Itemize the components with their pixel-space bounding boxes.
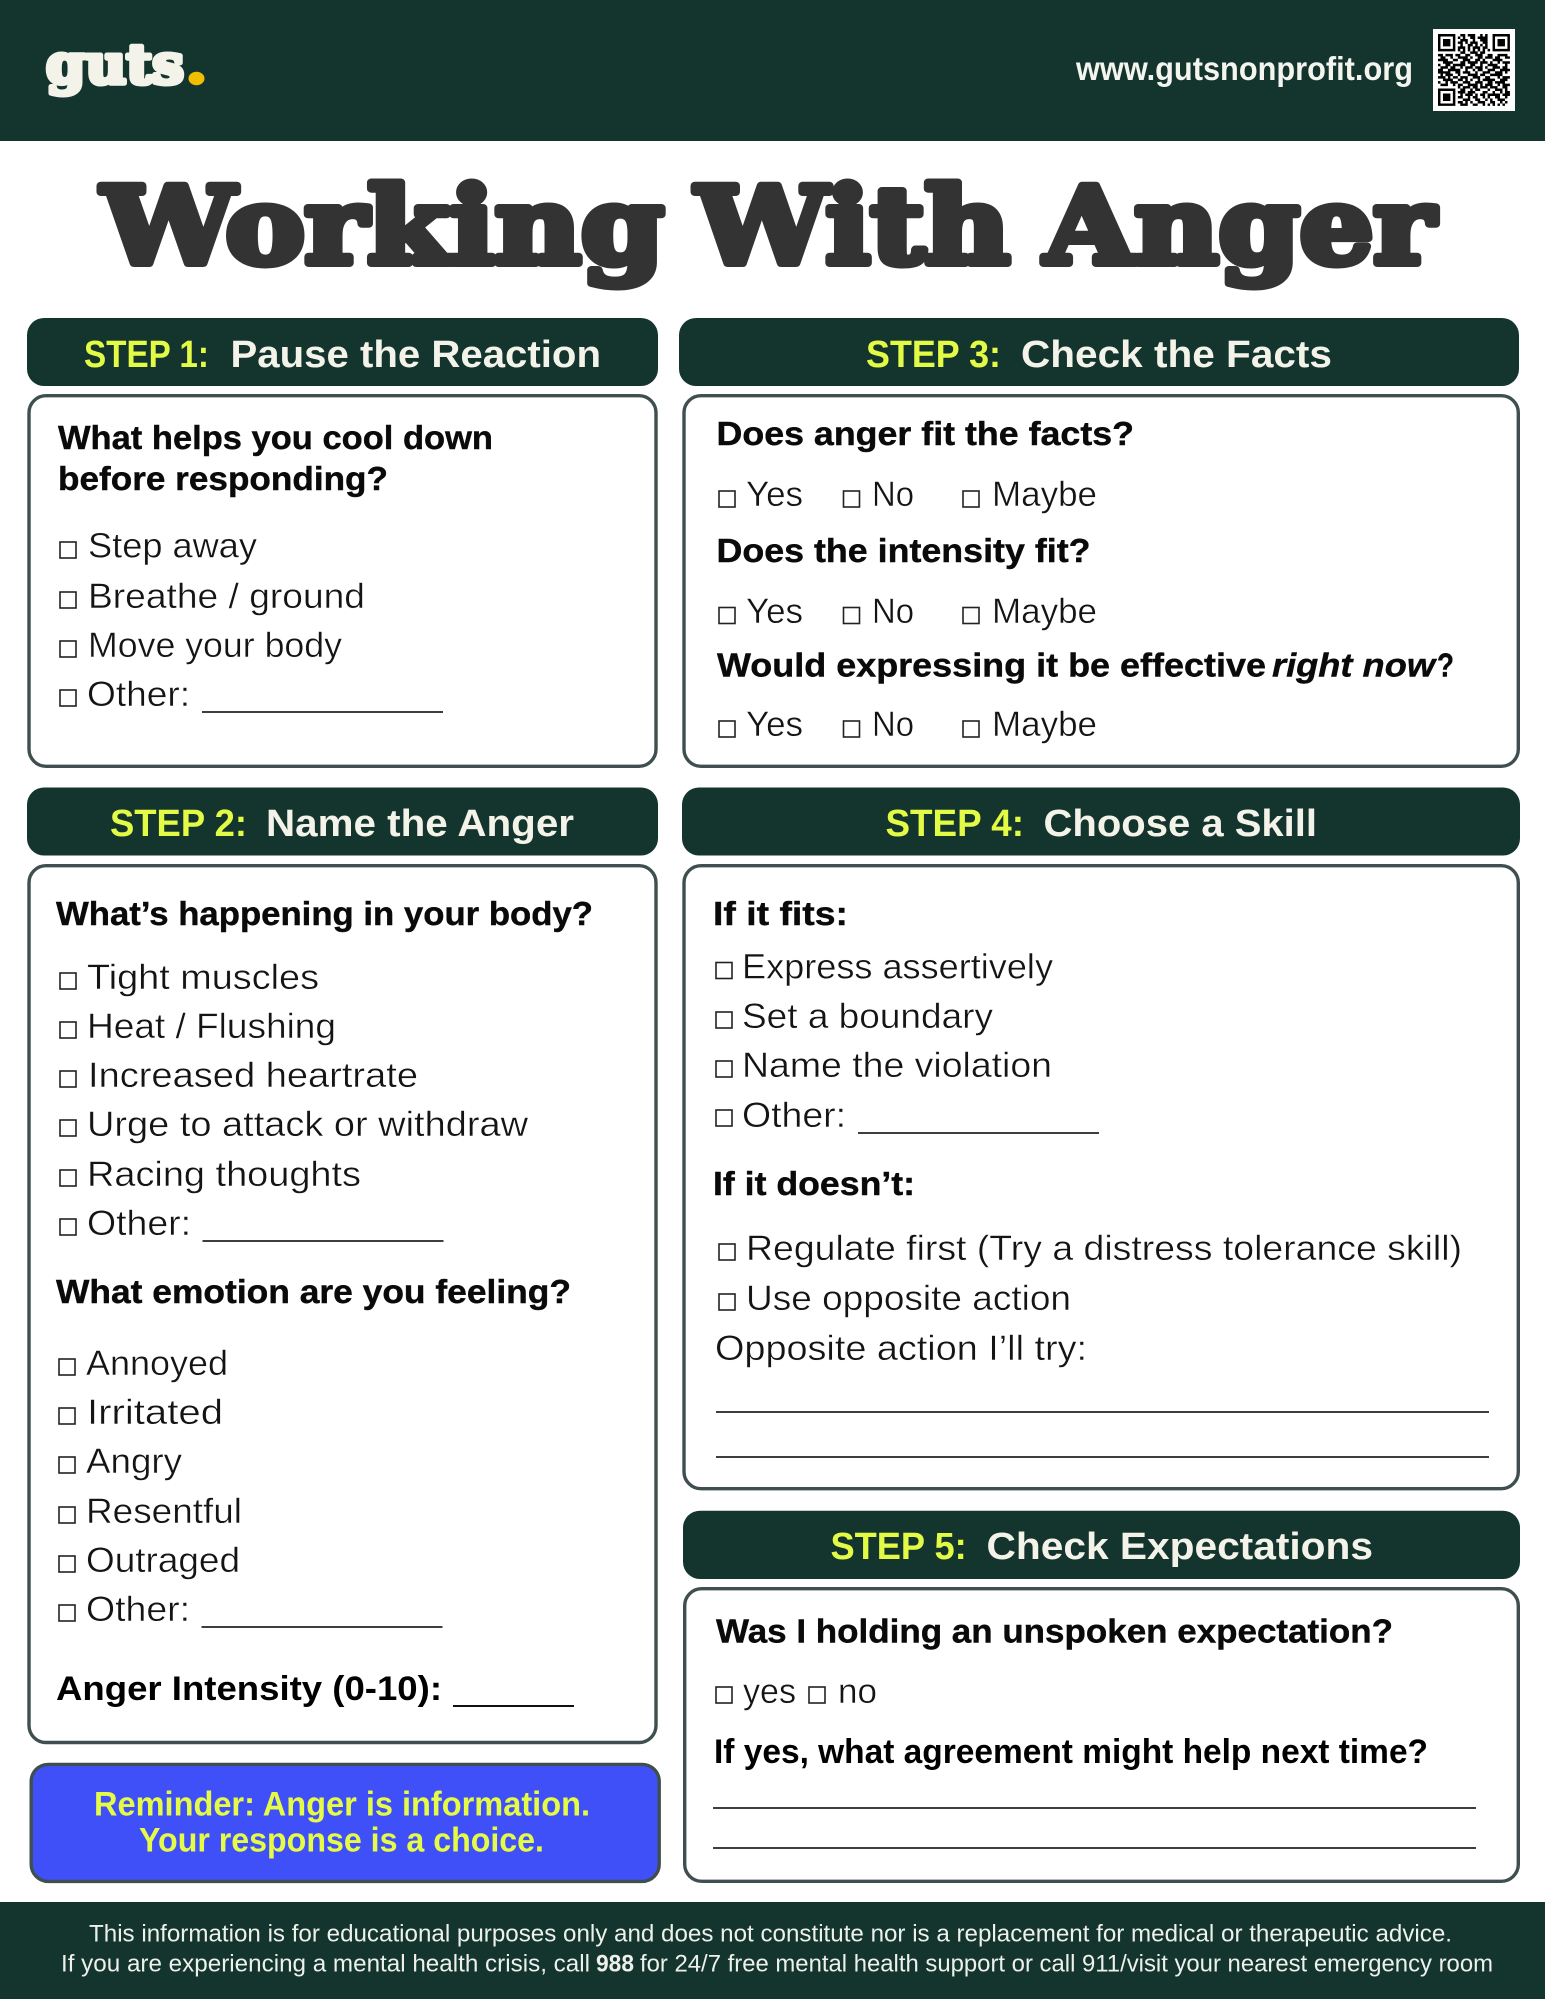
step 5 heading bar	[683, 1511, 1520, 1579]
question: effective right now: ?	[1437, 647, 1454, 684]
checklist: emotions: Other:	[86, 1590, 190, 1629]
opposite action write-in: Opposite action I’ll try:	[715, 1329, 1087, 1368]
subheading: if it fits: If it fits:	[713, 895, 848, 932]
checklist: if it fits: Set a boundary	[742, 997, 994, 1036]
checklist: cool down options	[60, 527, 443, 714]
question: agreement: If yes, what agreement might help next time?	[714, 1733, 1428, 1771]
options row 3: Yes	[746, 705, 803, 744]
options row 1: Yes	[746, 475, 803, 514]
callout: reminder: Your response is a choice.	[139, 1822, 544, 1860]
title: Working	[101, 163, 664, 288]
footer disclaimer	[0, 1902, 1545, 1999]
checklist: body signs	[60, 958, 529, 1243]
checklist: emotions: Resentful	[86, 1492, 242, 1531]
question: intensity: Does the intensity fit?	[716, 532, 1090, 569]
options row 2: No	[872, 592, 914, 631]
footer disclaimer: If you are experiencing a mental health crisis, call	[61, 1951, 590, 1978]
options row 3: Maybe	[992, 705, 1097, 744]
question: unspoken expectation: Was I holding an unspoken expectation?	[716, 1613, 1393, 1650]
question: fit the facts: Does anger fit the facts?	[716, 415, 1134, 452]
footer disclaimer: 988	[596, 1951, 634, 1978]
options row 2: Yes	[746, 592, 803, 631]
checklist: if it doesn't	[719, 1229, 1462, 1318]
step 2 heading bar: Name the Anger	[266, 803, 574, 845]
checklist: if it doesn't: Use opposite action	[746, 1279, 1071, 1318]
checklist: emotions	[59, 1344, 442, 1629]
title: With	[695, 163, 1010, 288]
step 4 heading bar: STEP 4:	[886, 803, 1024, 845]
checklist: if it fits: Express assertively	[742, 947, 1054, 986]
subheading: if it doesn't: If it doesn’t:	[713, 1165, 915, 1202]
checklist: if it fits: Name the violation	[742, 1046, 1052, 1085]
options row 2	[719, 592, 1097, 631]
callout: reminder: Reminder: Anger is information.	[94, 1786, 590, 1824]
panel: step 2	[29, 866, 656, 1742]
step 2 heading bar	[27, 788, 658, 856]
checklist: body signs: Other:	[87, 1204, 191, 1243]
step 3 heading bar: Check the Facts	[1021, 334, 1332, 376]
checklist: if it fits	[716, 947, 1099, 1135]
question: cool down: before responding?	[58, 460, 388, 497]
options row 3: No	[872, 705, 914, 744]
checklist: cool down options: Move your body	[88, 626, 342, 665]
question: cool down: What helps you cool down	[58, 419, 493, 456]
anger intensity rating: Anger Intensity (0-10):	[56, 1670, 442, 1708]
checklist: emotions: Outraged	[86, 1541, 240, 1580]
step 3 heading bar: STEP 3:	[866, 334, 1001, 376]
options row 3	[719, 705, 1097, 744]
options row 1	[719, 475, 1097, 514]
options: yes no	[716, 1672, 877, 1711]
checklist: cool down options: Step away	[88, 527, 258, 566]
question: emotion: What emotion are you feeling?	[56, 1273, 571, 1310]
checklist: if it doesn't: Regulate first (Try a distress tolerance skill)	[746, 1229, 1462, 1268]
footer disclaimer: This information is for educational purposes only and does not constitute nor is a replacement for medical or therapeutic advice.	[89, 1921, 1452, 1948]
checklist: emotions: Annoyed	[86, 1344, 228, 1383]
step 5 heading bar: Check Expectations	[986, 1526, 1373, 1568]
step 1 heading bar: STEP 1:	[84, 334, 209, 376]
checklist: body signs: Tight muscles	[87, 958, 319, 997]
logo: guts.: guts	[46, 32, 184, 96]
step 4 heading bar: Choose a Skill	[1044, 803, 1317, 845]
step 1 heading bar	[27, 318, 658, 386]
step 5 heading bar: STEP 5:	[830, 1526, 967, 1568]
question: body: What’s happening in your body?	[56, 895, 593, 932]
callout: reminder	[31, 1764, 659, 1881]
checklist: body signs: Increased heartrate	[88, 1056, 418, 1095]
write-in lines	[713, 1808, 1476, 1848]
header band	[0, 0, 1545, 141]
question: effective right now: right now	[1272, 647, 1438, 684]
checklist: cool down options: Other:	[87, 675, 190, 714]
checklist: emotions: Angry	[86, 1442, 183, 1481]
checklist: emotions: Irritated	[87, 1393, 223, 1432]
title	[101, 163, 1436, 288]
options row 1: Maybe	[992, 475, 1097, 514]
step 4 heading bar	[682, 788, 1520, 856]
checklist: cool down options: Breathe / ground	[88, 577, 365, 616]
footer disclaimer: for 24/7 free mental health support or call 911/visit your nearest emergency room	[640, 1951, 1493, 1978]
checklist: body signs: Racing thoughts	[87, 1155, 361, 1194]
icon: QR code	[1433, 29, 1515, 111]
step 3 heading bar	[679, 318, 1519, 386]
question: cool down	[58, 419, 493, 497]
question: effective right now	[717, 647, 1454, 684]
panel: step 3	[684, 396, 1518, 766]
checklist: body signs: Heat / Flushing	[87, 1007, 336, 1046]
question: effective right now: Would expressing it be effective	[717, 647, 1266, 684]
options row 2: Maybe	[992, 592, 1097, 631]
options: yes no: no	[838, 1672, 877, 1711]
website url: www.gutsnonprofit.org	[1075, 50, 1413, 87]
step 1 heading bar: Pause the Reaction	[230, 334, 601, 376]
step 2 heading bar: STEP 2:	[110, 803, 247, 845]
options row 1: No	[872, 475, 914, 514]
options: yes no: yes	[743, 1672, 796, 1711]
panel: step 5	[685, 1589, 1518, 1881]
checklist: body signs: Urge to attack or withdraw	[87, 1105, 529, 1144]
title: Anger	[1043, 163, 1436, 288]
panel: step 4	[684, 866, 1518, 1489]
panel: step 1	[29, 396, 656, 766]
checklist: if it fits: Other:	[742, 1096, 846, 1135]
